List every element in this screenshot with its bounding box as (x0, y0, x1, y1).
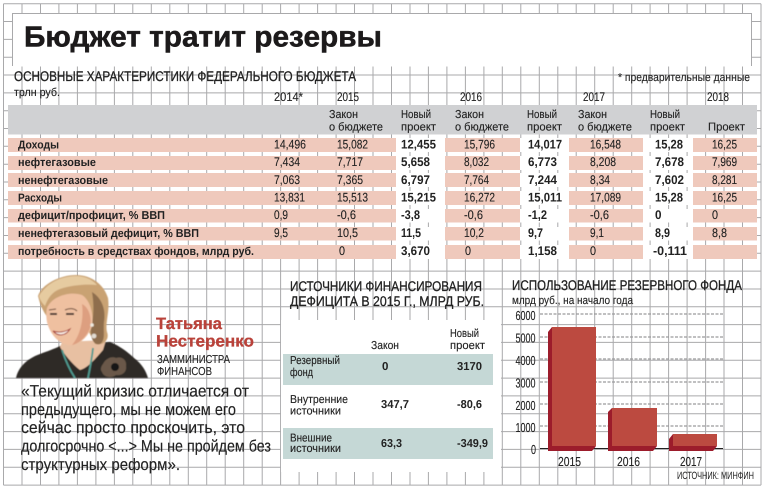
row: ненефтегазовые: 8,281 (712, 173, 737, 187)
table header band: проект (650, 122, 686, 134)
table header band: о бюджете (578, 122, 632, 134)
table header band: Закон (578, 109, 607, 121)
row: ненефтегазовый дефицит: 9,1 (590, 226, 604, 240)
row: external sources (283, 428, 493, 459)
row: ненефтегазовые: 7,602 (655, 173, 684, 187)
row: domestic sources: -80,6 (457, 399, 482, 411)
row: reserve fund (283, 354, 493, 385)
row: ненефтегазовые: ненефтегазовые (18, 175, 108, 187)
column headers: проект (450, 340, 486, 352)
row: дефицит/профицит: 0 (712, 208, 718, 222)
row: расходы: Расходы (18, 192, 62, 204)
row: reserve fund: 3170 (457, 361, 482, 373)
row: потребность в средствах фондов (18, 244, 687, 258)
row: нефтегазовые: нефтегазовые (18, 157, 96, 169)
heading: ДЕФИЦИТА В 2015 Г., МЛРД РУБ. (290, 293, 484, 309)
row: reserve fund: фонд (290, 367, 313, 379)
quote text (21, 382, 271, 474)
row: доходы: 14,496 (274, 138, 306, 152)
face (46, 294, 93, 345)
neck (60, 340, 106, 370)
row: потребность в средствах фондов: -0,111 (653, 244, 687, 258)
row: расходы: 15,011 (528, 190, 562, 204)
row: дефицит/профицит: -0,6 (464, 208, 483, 222)
row: ненефтегазовый дефицит: 9,7 (528, 226, 543, 240)
x axis labels: 2015 (558, 454, 581, 469)
year labels: 2016 (460, 90, 482, 104)
bar 2015 (548, 327, 596, 451)
row: domestic sources: Внутренние (290, 394, 348, 406)
table heading: ОСНОВНЫЕ ХАРАКТЕРИСТИКИ ФЕДЕРАЛЬНОГО БЮДЖЕТА (14, 68, 357, 84)
row: расходы: 16,25 (712, 190, 737, 204)
quote text: долгосрочно <...> Мы не пройдем без (21, 438, 271, 456)
row: domestic sources: 347,7 (381, 399, 409, 411)
row: external sources: 63,3 (381, 438, 402, 450)
earrings (90, 323, 94, 327)
row: ненефтегазовый дефицит: 8,9 (655, 226, 670, 240)
row: нефтегазовые: 8,032 (464, 155, 489, 169)
year labels: 2018 (707, 90, 729, 104)
name (156, 315, 254, 350)
row: расходы: 15,215 (401, 190, 436, 204)
table header band: Новый (401, 109, 431, 121)
row: дефицит/профицит: 0 (655, 208, 662, 222)
row: ненефтегазовый дефицит: 10,2 (464, 226, 484, 240)
x axis labels (558, 454, 702, 469)
row: доходы: 15,082 (337, 138, 368, 152)
table header band: проект (527, 122, 563, 134)
column headers (371, 328, 486, 352)
row: нефтегазовые (18, 155, 737, 169)
row: reserve fund: Резервный (290, 355, 340, 367)
column headers: Закон (371, 340, 399, 352)
row: дефицит/профицит: -1,2 (528, 208, 547, 222)
title: Бюджет тратит резервы (24, 22, 382, 54)
row: доходы: 16,548 (590, 138, 621, 152)
row: ненефтегазовый дефицит (18, 226, 727, 240)
hair highlights (39, 276, 97, 306)
row: доходы: 15,28 (655, 138, 683, 152)
hair (38, 275, 108, 344)
quote text: сейчас просто проскочить, это (21, 419, 245, 437)
row: доходы (18, 138, 737, 152)
x axis labels: 2016 (617, 454, 640, 469)
column headers: Новый (450, 328, 479, 340)
row: доходы: 12,455 (401, 138, 436, 152)
panel: reserve fund use (512, 277, 754, 482)
row: reserve fund: 0 (382, 361, 388, 373)
y axis labels: 4000 (516, 353, 536, 368)
row: расходы: 15,28 (655, 190, 683, 204)
footnote: * предварительные данные (618, 72, 750, 84)
row: дефицит/профицит: -0,6 (337, 208, 356, 222)
row: ненефтегазовый дефицит: 11,5 (401, 226, 421, 240)
y axis labels (516, 308, 536, 457)
table header band: Закон (455, 109, 484, 121)
job title: ФИНАНСОВ (157, 366, 212, 378)
row: domestic sources: источники (290, 406, 341, 418)
photo: Tatyana Nesterenko portrait (16, 275, 148, 378)
row: external sources: Внешние (290, 432, 332, 444)
name: Нестеренко (156, 332, 254, 350)
heading: ИСТОЧНИКИ ФИНАНСИРОВАНИЯ (290, 278, 482, 294)
name: Татьяна (156, 315, 223, 333)
lanyard (62, 348, 93, 378)
row: дефицит/профицит: -3,8 (401, 208, 420, 222)
y axis labels: 3000 (516, 376, 536, 390)
face shading (72, 304, 91, 345)
quote text: «Текущий кризис отличается от (21, 382, 249, 400)
row: ненефтегазовый дефицит: 9,5 (274, 226, 288, 240)
row: дефицит/профицит: 0,9 (274, 208, 288, 222)
row: ненефтегазовый дефицит: 10,5 (337, 226, 358, 240)
heading (290, 278, 484, 309)
row: нефтегазовые: 8,208 (590, 155, 616, 169)
row: external sources: источники (290, 443, 341, 455)
row: доходы: 15,796 (464, 138, 495, 152)
bar chart (516, 308, 723, 469)
row: нефтегазовые: 6,773 (528, 155, 557, 169)
title panel (12, 14, 752, 66)
row: ненефтегазовые (18, 173, 737, 187)
row: нефтегазовые: 7,678 (655, 155, 684, 169)
row: ненефтегазовые: 8,34 (590, 173, 610, 187)
jacket (16, 342, 148, 378)
row: доходы: 14,017 (528, 138, 562, 152)
x axis labels: 2017 (680, 454, 702, 469)
year labels (274, 90, 729, 104)
bar 2017 (669, 434, 717, 451)
row: доходы: Доходы (18, 140, 59, 152)
y axis labels: 6000 (516, 308, 536, 323)
row: потребность в средствах фондов: 0 (590, 244, 596, 258)
table header band: Проект (708, 122, 746, 134)
panel: deficit financing sources (281, 278, 501, 472)
row: потребность в средствах фондов: 0 (339, 244, 345, 258)
row: расходы: 13,831 (274, 190, 305, 204)
row: external sources: -349,9 (457, 438, 488, 450)
job title: ЗАММИНИСТРА (157, 354, 230, 366)
year labels: 2015 (337, 90, 359, 104)
row: ненефтегазовые: 7,365 (337, 173, 363, 187)
row: нефтегазовые: 5,658 (401, 155, 430, 169)
smile (53, 329, 70, 335)
row: потребность в средствах фондов: потребность в средствах фондов, млрд руб. (18, 246, 254, 258)
row: ненефтегазовые: 7,063 (274, 173, 300, 187)
row: ненефтегазовый дефицит: 8,8 (712, 226, 727, 240)
table header band: о бюджете (329, 122, 383, 134)
table header band: Закон (329, 109, 358, 121)
row backgrounds (8, 138, 757, 259)
row: расходы: 17,089 (590, 190, 621, 204)
row: ненефтегазовый дефицит: ненефтегазовый дефицит, % ВВП (18, 228, 199, 240)
unit note: трлн руб. (14, 87, 60, 99)
row: дефицит/профицит: -0,6 (590, 208, 609, 222)
table header band: Новый (650, 109, 680, 121)
row: дефицит/профицит (18, 208, 718, 222)
panel: Nesterenko quote (16, 275, 271, 474)
y axis labels: 2000 (516, 398, 536, 413)
year labels: 2014* (274, 90, 303, 104)
row: расходы (18, 190, 737, 204)
quote text: структурных реформ». (21, 456, 180, 474)
table header band: Новый (527, 109, 557, 121)
row: ненефтегазовые: 7,244 (528, 173, 557, 187)
table header band: проект (401, 122, 437, 134)
row: domestic sources (290, 394, 482, 418)
row: нефтегазовые: 7,717 (337, 155, 363, 169)
table header band: о бюджете (455, 122, 509, 134)
panel: federal budget table (8, 68, 757, 259)
year labels: 2017 (583, 90, 605, 104)
y axis labels: 5000 (516, 330, 536, 346)
row: доходы: 16,25 (712, 138, 737, 152)
row: нефтегазовые: 7,434 (274, 155, 300, 169)
table header band (8, 105, 757, 134)
quote text: предыдущего, мы не можем его (21, 401, 236, 419)
row: нефтегазовые: 7,969 (712, 155, 737, 169)
row: потребность в средствах фондов: 1,158 (528, 244, 557, 258)
brows and eyes (49, 309, 77, 311)
hair shadow (91, 292, 104, 344)
row: потребность в средствах фондов: 0 (465, 244, 471, 258)
row: ненефтегазовые: 7,764 (464, 173, 489, 187)
row: ненефтегазовые: 6,797 (401, 173, 430, 187)
row: расходы: 16,272 (464, 190, 495, 204)
row: расходы: 15,513 (337, 190, 368, 204)
row: дефицит/профицит: дефицит/профицит, % ВВП (18, 210, 165, 222)
job title (157, 354, 230, 378)
brooch (101, 357, 126, 377)
bar 2016 (608, 408, 657, 451)
row: потребность в средствах фондов: 3,670 (401, 244, 430, 258)
y axis labels: 1000 (516, 420, 536, 435)
chart unit: млрд руб., на начало года (512, 295, 634, 307)
y axis labels: 0 (531, 442, 536, 457)
